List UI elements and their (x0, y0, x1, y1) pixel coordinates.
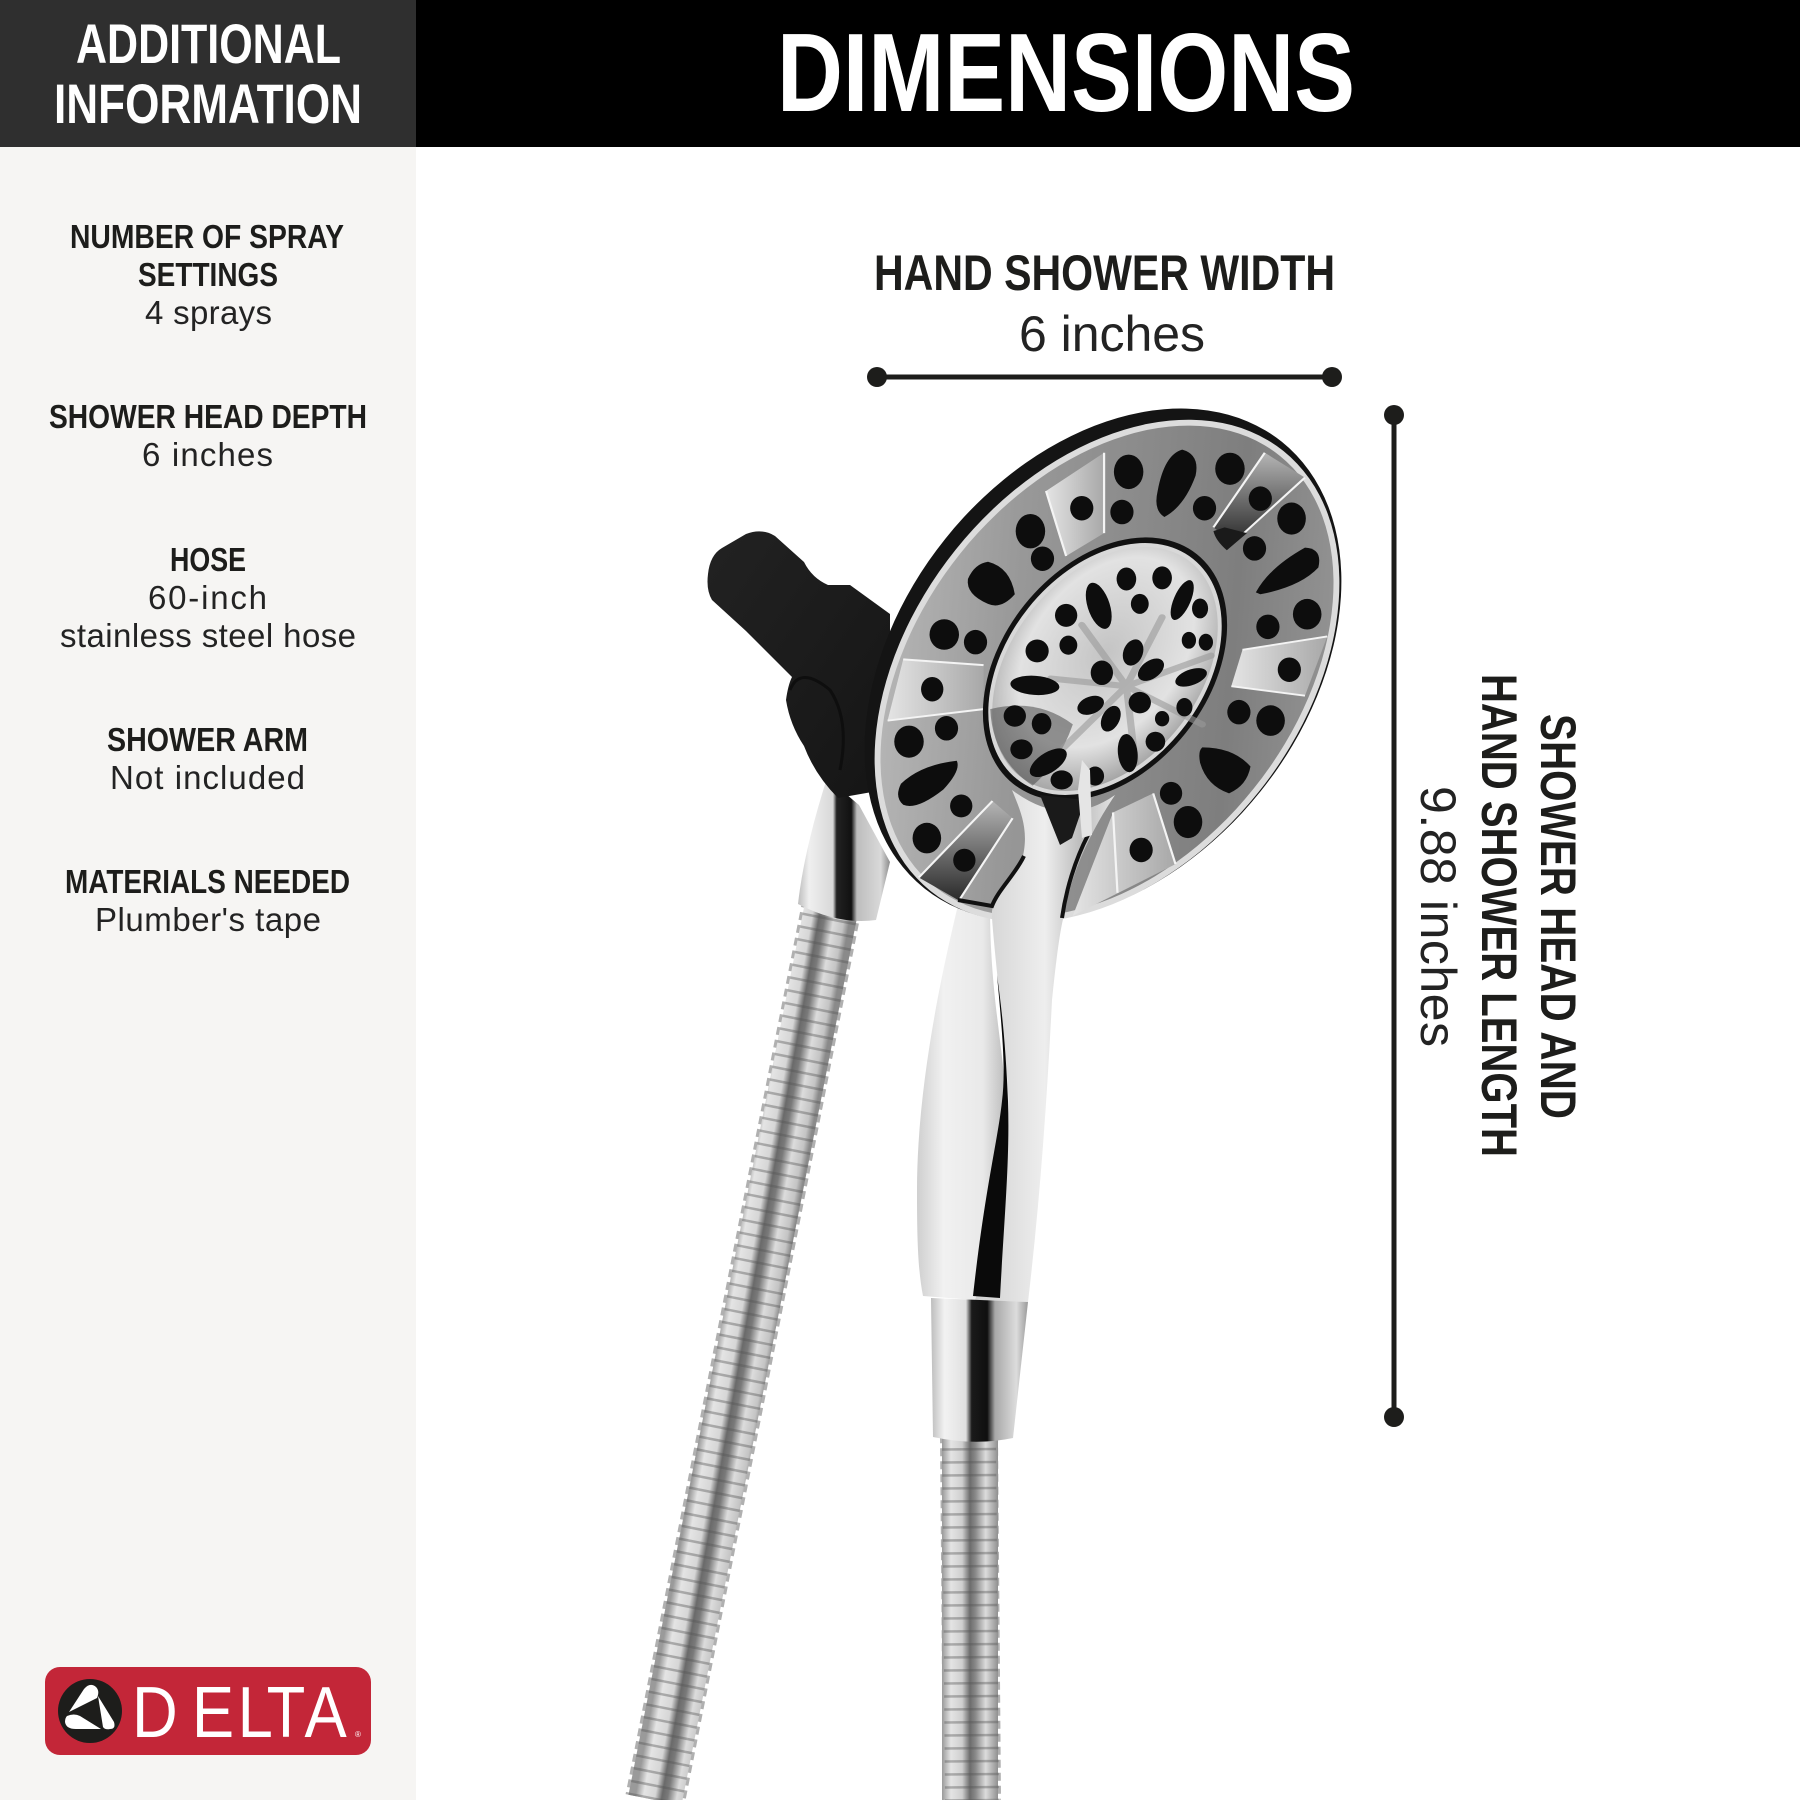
header: additional information: INFORMATION (54, 72, 362, 135)
spec: hose: HOSE (170, 541, 246, 578)
spec: number of spray settings: SETTINGS (138, 256, 278, 293)
label: shower head and hand shower length: HAND SHOWER LENGTH (1471, 674, 1527, 1157)
logo: Delta: ® (355, 1730, 361, 1739)
hand shower body: neck and stripe (958, 760, 1115, 1302)
hose: left (655, 905, 832, 1800)
inner nozzle star shading (990, 617, 1211, 786)
spec: shower arm: SHOWER ARM (107, 721, 308, 758)
swivel mount (708, 531, 890, 798)
header: dimensions title: DIMENSIONS (777, 11, 1355, 135)
label: shower head and hand shower length (1410, 674, 1586, 1157)
spec: number of spray settings: NUMBER OF SPRAY (70, 218, 344, 255)
label: hand shower width: HAND SHOWER WIDTH (874, 245, 1335, 301)
spec: materials needed (65, 863, 350, 938)
hose collar (798, 778, 890, 921)
hose: right (942, 1435, 998, 1800)
spec: shower head depth (49, 398, 367, 473)
header: additional information (0, 0, 416, 147)
label: shower head and hand shower length: 9.88 inches (1410, 786, 1466, 1047)
logo: Delta: DELTA (132, 1673, 347, 1753)
spec: hose (60, 541, 356, 654)
hand shower body: rear (917, 905, 1005, 1300)
spec: number of spray settings: 4 sprays (145, 294, 272, 331)
shower head (767, 315, 1439, 1015)
dimension arrow: length (1384, 405, 1404, 1427)
handle collar (931, 1298, 1028, 1442)
panel: additional information sidebar (0, 147, 416, 1800)
spec: hose: 60-inch (148, 579, 267, 616)
spec: shower arm: Not included (110, 759, 305, 796)
spec: materials needed: MATERIALS NEEDED (65, 863, 350, 900)
label: shower head and hand shower length: SHOWER HEAD AND (1530, 714, 1586, 1119)
spec: shower arm (107, 721, 308, 796)
spec: shower head depth: SHOWER HEAD DEPTH (49, 398, 367, 435)
dimension arrow: width (867, 367, 1342, 387)
spray holes (894, 450, 1321, 872)
product: hand shower illustration (655, 315, 1439, 1800)
label: hand shower width: 6 inches (1019, 306, 1205, 362)
spec: materials needed: Plumber's tape (95, 901, 321, 938)
spec: shower head depth: 6 inches (142, 436, 273, 473)
spec: number of spray settings (70, 218, 344, 331)
header: dimensions title (416, 0, 1800, 147)
spec: hose: stainless steel hose (60, 617, 356, 654)
label: hand shower width (874, 245, 1335, 362)
logo: Delta (45, 1667, 371, 1755)
header: additional information: ADDITIONAL (76, 12, 341, 75)
